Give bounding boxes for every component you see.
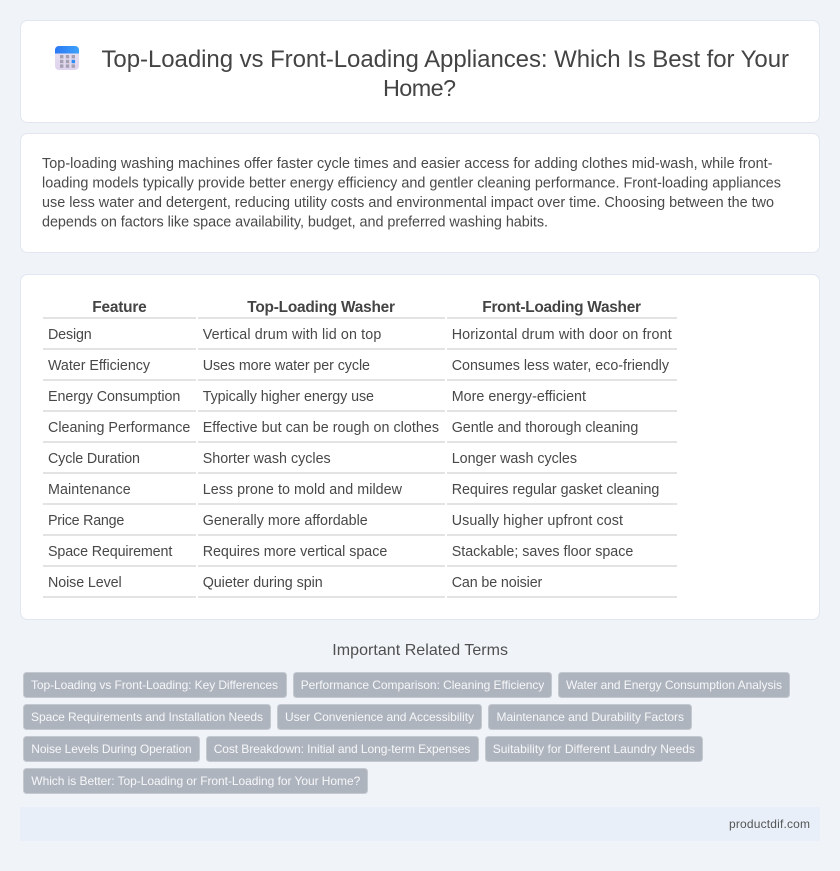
tag: maintenance and durability <box>488 704 692 730</box>
row: noise level: Noise Level <box>48 575 122 591</box>
row: cleaning performance: Cleaning Performance <box>48 420 190 436</box>
row: water efficiency: Uses more water per cycle <box>203 358 370 374</box>
tag: cost breakdown: Cost Breakdown: Initial and Long-term Expenses <box>214 742 470 756</box>
tag: water and energy: Water and Energy Consumption Analysis <box>566 678 782 692</box>
tag: key differences <box>24 672 286 698</box>
footer <box>20 807 820 841</box>
row: energy consumption: Energy Consumption <box>48 389 180 405</box>
intro paragraph: Top-loading washing machines offer faster cycle times and easier access for adding clothes mid-wash, while front- <box>42 156 773 172</box>
tag: maintenance and durability: Maintenance and Durability Factors <box>496 710 684 724</box>
tag: suitability: Suitability for Different Laundry Needs <box>493 742 695 756</box>
row: energy consumption: More energy-efficient <box>452 389 586 405</box>
row: maintenance: Less prone to mold and mildew <box>203 482 403 498</box>
icon: calendar <box>55 46 79 70</box>
row: space requirement: Requires more vertical space <box>203 544 387 560</box>
row: design: Horizontal drum with door on front <box>452 327 672 343</box>
tag: noise levels: Noise Levels During Operation <box>31 742 192 756</box>
row: cycle duration <box>43 451 677 474</box>
tag: space requirements: Space Requirements and Installation Needs <box>31 710 263 724</box>
row: cleaning performance: Effective but can be rough on clothes <box>203 420 439 436</box>
table header: Feature <box>92 299 147 316</box>
tag: cost breakdown <box>206 736 478 762</box>
row: cycle duration: Cycle Duration <box>48 451 140 467</box>
panel: title header <box>20 20 820 122</box>
row: maintenance <box>43 482 677 505</box>
panel: introduction <box>20 134 820 252</box>
row: maintenance: Requires regular gasket cleaning <box>452 482 659 498</box>
row: price range: Generally more affordable <box>203 513 368 529</box>
table header: Top-Loading Washer <box>247 299 395 316</box>
row: noise level <box>43 575 677 598</box>
row: price range: Price Range <box>48 513 124 529</box>
tag: which is better: Which is Better: Top-Loading or Front-Loading for Your Home? <box>31 774 361 788</box>
row: water efficiency <box>43 358 677 381</box>
row: energy consumption <box>43 389 677 412</box>
row: design: Design <box>48 327 92 343</box>
related term tags <box>24 672 790 794</box>
intro paragraph: loading models typically provide better energy efficiency and gentler cleaning performance. Front-loading appliances <box>42 176 781 192</box>
row: price range <box>43 513 677 536</box>
table header: Front-Loading Washer <box>482 299 641 316</box>
row: noise level: Can be noisier <box>452 575 543 591</box>
intro paragraph: use less water and detergent, reducing utility costs and environmental impact over time. Choosing between the two <box>42 195 774 211</box>
title <box>102 46 789 101</box>
row: space requirement: Space Requirement <box>48 544 172 560</box>
row: design: Vertical drum with lid on top <box>203 327 381 343</box>
tag: water and energy <box>558 672 790 698</box>
footer site name: productdif.com <box>729 817 810 831</box>
tag: suitability <box>486 736 702 762</box>
tag: noise levels <box>24 736 200 762</box>
tag: user convenience <box>278 704 482 730</box>
row: energy consumption: Typically higher energy use <box>203 389 374 405</box>
row: cycle duration: Shorter wash cycles <box>203 451 331 467</box>
row: water efficiency: Water Efficiency <box>48 358 151 374</box>
title: Top-Loading vs Front-Loading Appliances: Which Is Best for Your <box>102 46 789 73</box>
row: cleaning performance: Gentle and thorough cleaning <box>452 420 638 436</box>
row: noise level: Quieter during spin <box>203 575 323 591</box>
tag: performance comparison <box>294 672 552 698</box>
intro paragraph <box>42 156 781 230</box>
row: cleaning performance <box>43 420 677 443</box>
tag: which is better <box>24 768 368 794</box>
panel: comparison table <box>20 274 820 620</box>
tag: space requirements <box>24 704 270 730</box>
row: space requirement: Stackable; saves floor space <box>452 544 633 560</box>
intro paragraph: depends on factors like space availability, budget, and preferred washing habits. <box>42 214 548 230</box>
table header <box>43 299 677 319</box>
tag: user convenience: User Convenience and Accessibility <box>285 710 474 724</box>
row: price range: Usually higher upfront cost <box>452 513 623 529</box>
row: cycle duration: Longer wash cycles <box>452 451 577 467</box>
row: maintenance: Maintenance <box>48 482 131 498</box>
row: water efficiency: Consumes less water, eco-friendly <box>452 358 670 374</box>
row: space requirement <box>43 544 677 567</box>
tag: performance comparison: Performance Comparison: Cleaning Efficiency <box>301 678 544 692</box>
tag: key differences: Top-Loading vs Front-Loading: Key Differences <box>31 678 278 692</box>
row: design <box>43 327 677 350</box>
heading: important related terms: Important Related Terms <box>332 642 508 659</box>
title: Home? <box>383 75 456 101</box>
